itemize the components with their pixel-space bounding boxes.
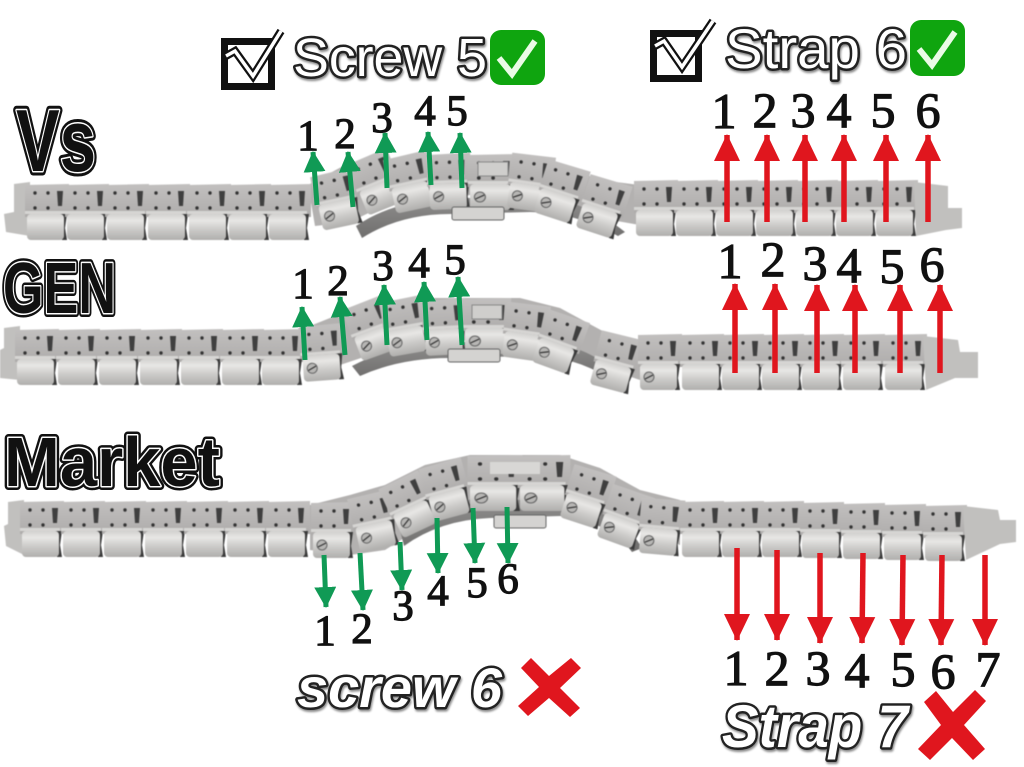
arrows: Market straps: [737, 548, 985, 645]
arrows: Vs straps: [727, 135, 928, 222]
arrows: GEN screws: [302, 277, 462, 360]
arrows: GEN straps: [735, 284, 940, 373]
numbers: Vs screws: [297, 88, 468, 160]
numbers: Market screws: 3: [392, 583, 414, 630]
numbers: GEN screws: 4: [408, 240, 430, 287]
icon: checkbox tick: [650, 21, 713, 82]
numbers: Vs screws: 5: [446, 88, 468, 135]
arrows: Market screws: [324, 507, 508, 610]
numbers: Market screws: [314, 556, 519, 655]
numbers: GEN straps: 3: [802, 235, 828, 291]
heading: Strap 6: [650, 17, 965, 82]
numbers: Market straps: 1: [724, 640, 748, 696]
text: Strap 6: Strap 6: [725, 17, 907, 80]
bracelet: Vs: [4, 148, 962, 240]
numbers: Vs screws: 1: [297, 113, 319, 160]
label: Vs: Vs: [16, 91, 96, 190]
label: Market: Market: [4, 423, 220, 501]
numbers: GEN screws: 5: [444, 237, 466, 284]
numbers: GEN screws: 3: [372, 243, 394, 290]
heading: Screw 5: [221, 28, 545, 90]
numbers: Vs straps: 3: [790, 82, 816, 138]
numbers: Vs straps: 2: [752, 82, 778, 138]
bracelet: GEN: [0, 294, 978, 395]
numbers: GEN straps: 1: [718, 233, 742, 289]
numbers: Market straps: 3: [806, 640, 830, 696]
numbers: GEN screws: 1: [292, 261, 314, 308]
icon: checkbox tick: [221, 31, 281, 90]
numbers: GEN straps: [718, 231, 944, 294]
numbers: Market straps: 6: [930, 643, 956, 699]
numbers: Vs straps: 6: [916, 82, 940, 138]
numbers: Vs straps: 1: [712, 83, 736, 139]
numbers: Market screws: 6: [497, 556, 519, 603]
icon: red cross: [518, 658, 581, 717]
numbers: Vs straps: 4: [826, 82, 852, 138]
numbers: Market straps: 5: [890, 641, 916, 697]
numbers: GEN screws: [292, 237, 466, 308]
label: GEN: GEN: [3, 249, 116, 329]
numbers: Market straps: 2: [764, 640, 790, 696]
numbers: GEN straps: 4: [836, 237, 862, 293]
label: Market: Market: [4, 423, 220, 501]
numbers: Vs screws: 2: [334, 111, 356, 158]
numbers: Vs screws: 3: [371, 95, 393, 142]
numbers: GEN straps: 2: [760, 231, 786, 287]
numbers: Market screws: 4: [427, 568, 449, 615]
callout: Strap 7: Strap 7: [722, 693, 910, 760]
numbers: Market screws: 1: [314, 608, 336, 655]
arrows: Vs screws: [313, 132, 462, 207]
icon: green check: [490, 30, 545, 85]
numbers: Vs straps: 5: [870, 82, 896, 138]
numbers: Market straps: [724, 640, 1000, 699]
numbers: GEN straps: 6: [920, 236, 944, 292]
numbers: Market straps: 7: [976, 641, 1000, 697]
callout: screw 6: screw 6: [297, 656, 503, 719]
label: Vs: Vs: [16, 91, 96, 190]
numbers: Vs screws: 4: [414, 88, 436, 135]
numbers: Market screws: 5: [466, 560, 488, 607]
icon: red cross: [918, 690, 986, 760]
numbers: Market screws: 2: [351, 606, 373, 653]
numbers: Vs straps: [712, 82, 940, 139]
text: Screw 5: Screw 5: [293, 28, 487, 88]
icon: green check: [910, 20, 965, 76]
numbers: Market straps: 4: [844, 642, 870, 698]
bracelet: Market: [4, 455, 1016, 561]
label: GEN: GEN: [3, 249, 116, 329]
numbers: GEN straps: 5: [880, 238, 904, 294]
numbers: GEN screws: 2: [327, 258, 349, 305]
